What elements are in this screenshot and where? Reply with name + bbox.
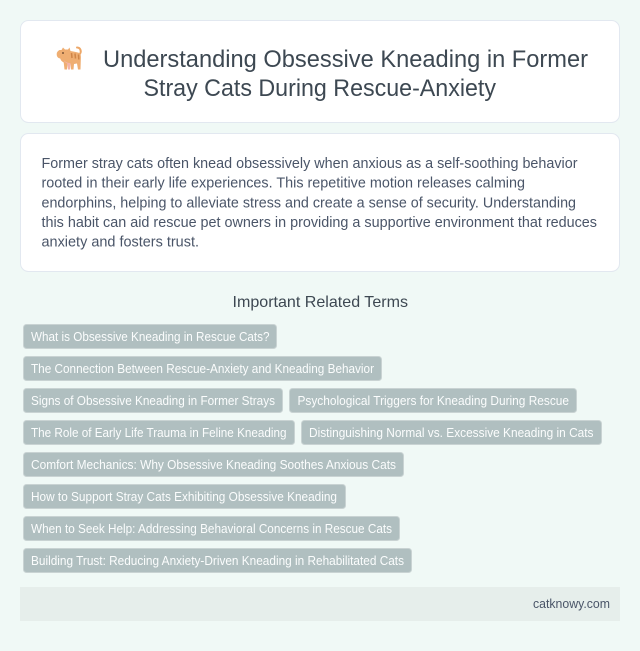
panel: description card [20,134,620,272]
description text [42,156,597,250]
chip: how to support: How to Support Stray Cats Exhibiting Obsessive Kneading [31,490,337,504]
chip: what is obsessive kneading [24,324,276,348]
chip: signs: Signs of Obsessive Kneading in Former Strays [31,394,275,408]
chip: when to seek help [24,516,400,540]
title text: Understanding Obsessive Kneading in Former [103,46,588,73]
description text: Former stray cats often knead obsessively when anxious as a self-soothing behavior [42,156,578,172]
chip: early life trauma [24,420,294,444]
chip: normal vs excessive [302,420,602,444]
chip: building trust [24,548,412,572]
footer bar [20,587,620,621]
chip: comfort mechanics [24,452,404,476]
panel: related term chips [24,324,602,572]
description text: this habit can aid rescue pet owners in providing a supportive environment that reduces [42,215,597,231]
chip: psychological triggers: Psychological Triggers for Kneading During Rescue [298,394,569,408]
icon: cat [57,48,81,70]
description text: rooted in their early life experiences. This repetitive motion releases calming [42,176,525,192]
chip: how to support [24,484,346,508]
title text: Stray Cats During Rescue-Anxiety [144,75,497,102]
chip: early life trauma: The Role of Early Life Trauma in Feline Kneading [31,426,286,440]
chip: rescue-anxiety connection: The Connection Between Rescue-Anxiety and Kneading Behavior [31,362,374,376]
title text [103,46,588,102]
chip: psychological triggers [290,388,576,412]
chip: what is obsessive kneading: What is Obsessive Kneading in Rescue Cats? [31,330,270,344]
description text: endorphins, helping to alleviate stress and create a sense of security. Understanding [42,196,576,212]
panel: title card [20,20,620,122]
footer site name: catknowy.com [533,596,610,611]
description text: anxiety and fosters trust. [42,234,199,250]
chip: when to seek help: When to Seek Help: Addressing Behavioral Concerns in Rescue Cats [31,522,392,536]
chip: rescue-anxiety connection [24,356,382,380]
chip: comfort mechanics: Comfort Mechanics: Why Obsessive Kneading Soothes Anxious Cats [31,458,396,472]
chip: signs [24,388,282,412]
chip: normal vs excessive: Distinguishing Normal vs. Excessive Kneading in Cats [309,426,594,440]
heading: related terms: Important Related Terms [232,294,408,311]
chip: building trust: Building Trust: Reducing Anxiety-Driven Kneading in Rehabilitated Cats [31,554,404,568]
